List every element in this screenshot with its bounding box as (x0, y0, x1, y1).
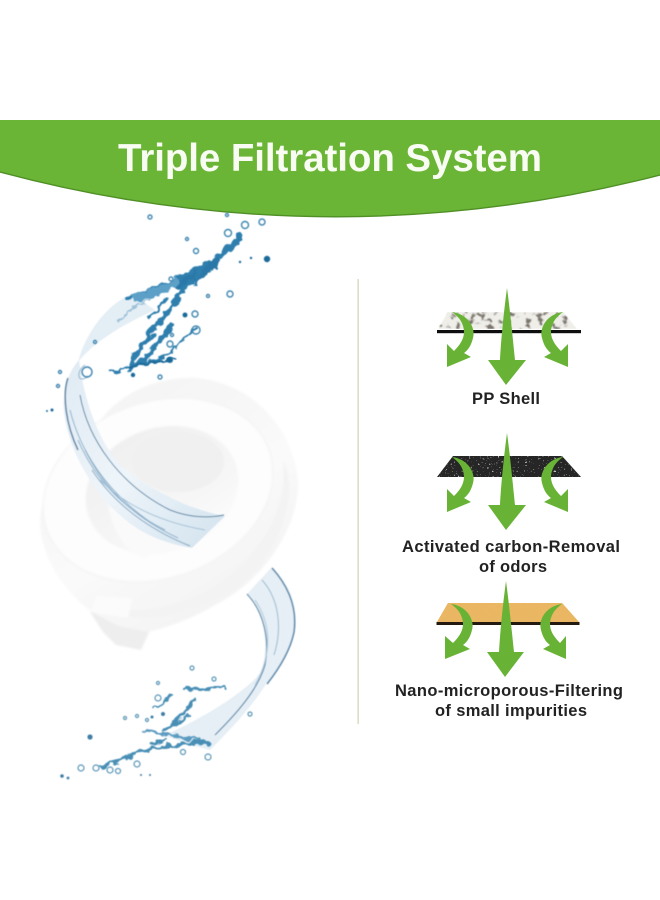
lower band (165, 567, 296, 750)
product: white filter housing (17, 367, 299, 650)
label: activated carbon: of odors (479, 558, 547, 576)
splash body (100, 688, 225, 768)
filter layer: PP shell (437, 288, 581, 385)
filter layer: nano-microporous (436, 581, 580, 677)
splash droplets (56, 214, 265, 388)
lower water stream (165, 567, 296, 750)
label: nano-microporous (395, 682, 623, 720)
right curved arrow (541, 457, 568, 512)
funnel interior shade (132, 432, 224, 492)
centre arrow (488, 288, 526, 385)
carbon slab (437, 456, 581, 477)
label: nano-microporous: of small impurities (435, 702, 587, 720)
solid drops (46, 256, 270, 412)
label: PP Shell: PP Shell (472, 390, 540, 408)
upper water stream (64, 294, 225, 548)
lower water splash (60, 666, 252, 779)
body shadow crescent (100, 460, 289, 618)
label: activated carbon (402, 538, 620, 576)
inner funnel opening (67, 405, 257, 575)
left curved arrow (445, 604, 473, 659)
outer body (40, 378, 298, 632)
vertical divider (358, 279, 359, 724)
label: nano-microporous: Nano-microporous-Filtering (395, 682, 623, 700)
front face ring (17, 367, 299, 613)
label: activated carbon: Activated carbon-Removal (402, 538, 620, 556)
dark base bar (436, 622, 580, 625)
right curved arrow (541, 312, 568, 367)
filter layer: activated carbon (437, 433, 581, 530)
band streak lines (65, 365, 224, 546)
green title banner (0, 120, 660, 217)
centre arrow (487, 581, 524, 677)
solid drops (60, 712, 165, 779)
spout (90, 590, 150, 650)
swirl band (64, 360, 225, 548)
orange granule slab (437, 603, 579, 622)
title: Triple Filtration System (118, 137, 542, 180)
pale upper sheet (78, 294, 155, 362)
funnel bottom (108, 505, 200, 558)
left curved arrow (447, 457, 474, 512)
centre arrow (488, 433, 526, 530)
black base bar (437, 330, 581, 333)
splash body (110, 236, 240, 372)
right curved arrow (540, 604, 566, 659)
splash droplets (78, 666, 252, 774)
upper water splash (46, 214, 270, 412)
pebble slab (438, 312, 577, 329)
left curved arrow (447, 312, 474, 367)
spout highlight (90, 596, 132, 618)
